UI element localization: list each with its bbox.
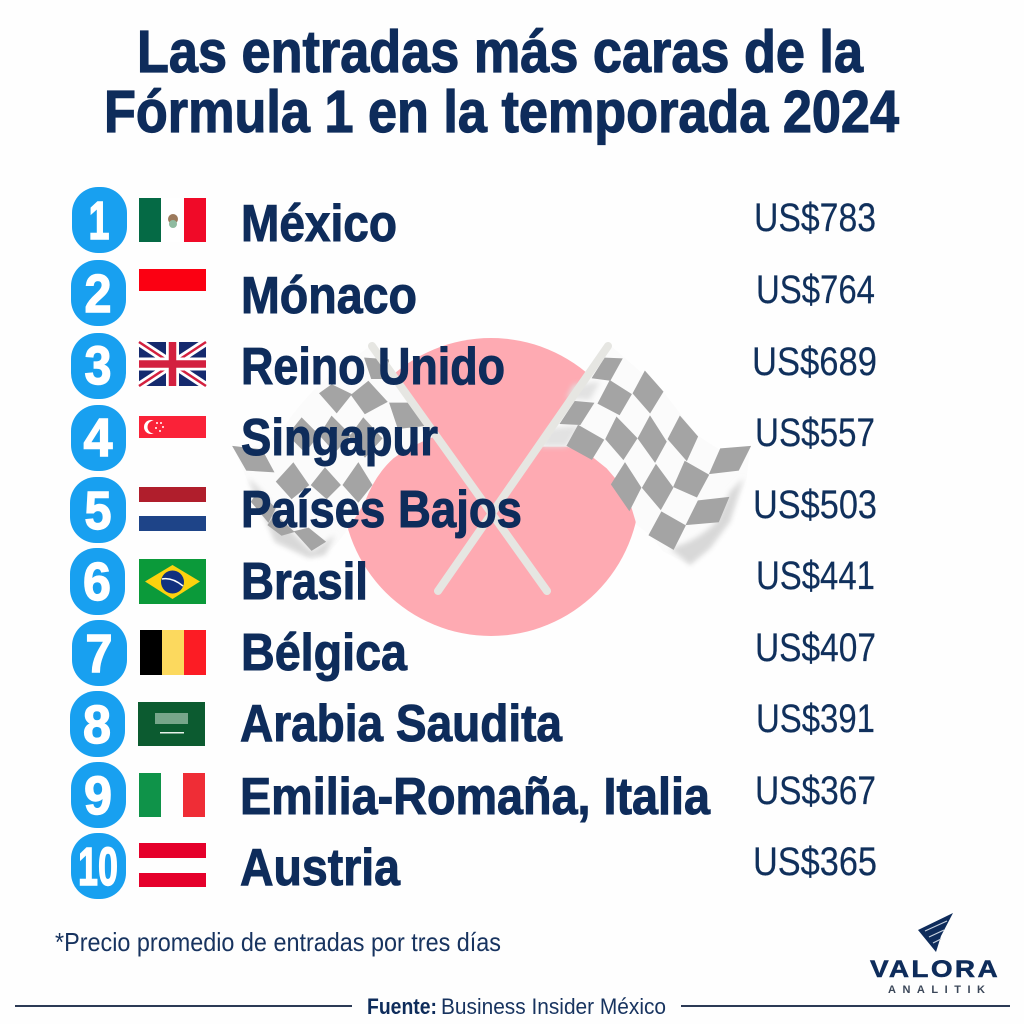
flag: Monaco [139, 269, 206, 291]
source line [15, 994, 1010, 1019]
source line: Business Insider México [441, 994, 666, 1019]
flag: Mexico [139, 198, 206, 242]
flag: Saudi Arabia [138, 702, 205, 746]
country name: Bélgica [241, 624, 408, 682]
row 7: Bélgica [72, 620, 876, 686]
country name: Países Bajos [241, 481, 522, 539]
price: US$391 [756, 697, 875, 741]
badge 9: 9 [84, 766, 112, 826]
badge 9 [71, 762, 126, 828]
badge 4 [71, 405, 126, 471]
badge 3 [71, 333, 126, 399]
badge 2: 2 [84, 264, 112, 324]
badge 1 [72, 187, 127, 253]
flag: Italy [139, 773, 205, 817]
row 2: Mónaco [71, 260, 875, 326]
price: US$407 [755, 626, 876, 670]
flag: Singapore [139, 416, 206, 438]
flag: Brazil [139, 559, 206, 604]
badge 7: 7 [86, 624, 112, 684]
row 6: Brasil [70, 548, 875, 615]
row 8: Arabia Saudita [70, 691, 875, 757]
row 9: Emilia-Romaña, Italia [71, 762, 876, 828]
badge 5: 5 [84, 481, 112, 541]
icon: logo triangle [918, 913, 953, 952]
badge 7 [72, 620, 127, 686]
price: US$441 [756, 554, 875, 598]
flag: Belgium [140, 630, 206, 675]
icon: right checkered flag [530, 345, 750, 565]
country name: México [241, 195, 397, 253]
badge 5 [70, 477, 126, 543]
price: US$764 [756, 268, 875, 312]
country name: Arabia Saudita [240, 695, 563, 753]
badge 6: 6 [83, 552, 111, 612]
source line: Fuente: [367, 994, 437, 1019]
badge 1: 1 [88, 191, 110, 251]
price: US$503 [753, 483, 877, 527]
country name: Singapur [241, 409, 438, 467]
country name: Brasil [241, 553, 368, 611]
icon: left checkered flag [233, 345, 438, 559]
title: Fórmula 1 en la temporada 2024 [104, 79, 899, 145]
badge 3: 3 [84, 336, 112, 396]
price: US$783 [754, 196, 876, 240]
logo: Valora Analitik: VALORA [870, 956, 1000, 983]
row 1: México [72, 187, 876, 253]
row 10: Austria [71, 833, 877, 899]
badge 6 [70, 548, 125, 615]
flag: Netherlands [139, 487, 206, 531]
row 5: Países Bajos [70, 477, 877, 543]
flag: United Kingdom [139, 342, 206, 386]
flag: Austria [139, 843, 206, 887]
country name: Mónaco [241, 267, 417, 325]
row 4: Singapur [71, 405, 875, 471]
price: US$365 [753, 840, 877, 884]
country name: Emilia-Romaña, Italia [240, 768, 711, 826]
badge 8: 8 [83, 695, 111, 755]
logo: Valora Analitik: ANALITIK [888, 984, 985, 996]
icon: flag poles [372, 346, 608, 591]
badge 10: 10 [78, 837, 118, 897]
price: US$367 [755, 769, 876, 813]
title: Las entradas más caras de la [137, 19, 864, 85]
row 3: Reino Unido [71, 333, 877, 399]
country name: Austria [240, 839, 401, 897]
price: US$689 [752, 340, 877, 384]
title [104, 19, 899, 145]
footnote: *Precio promedio de entradas por tres días [55, 927, 501, 957]
badge 2 [71, 260, 126, 326]
badge 10 [71, 833, 126, 899]
badge 8 [70, 691, 125, 757]
logo: Valora Analitik [870, 913, 1000, 996]
badge 4: 4 [84, 408, 112, 468]
price: US$557 [755, 411, 875, 455]
country name: Reino Unido [241, 338, 505, 396]
illustration: pink circle with crossed checkered flags [233, 338, 750, 636]
